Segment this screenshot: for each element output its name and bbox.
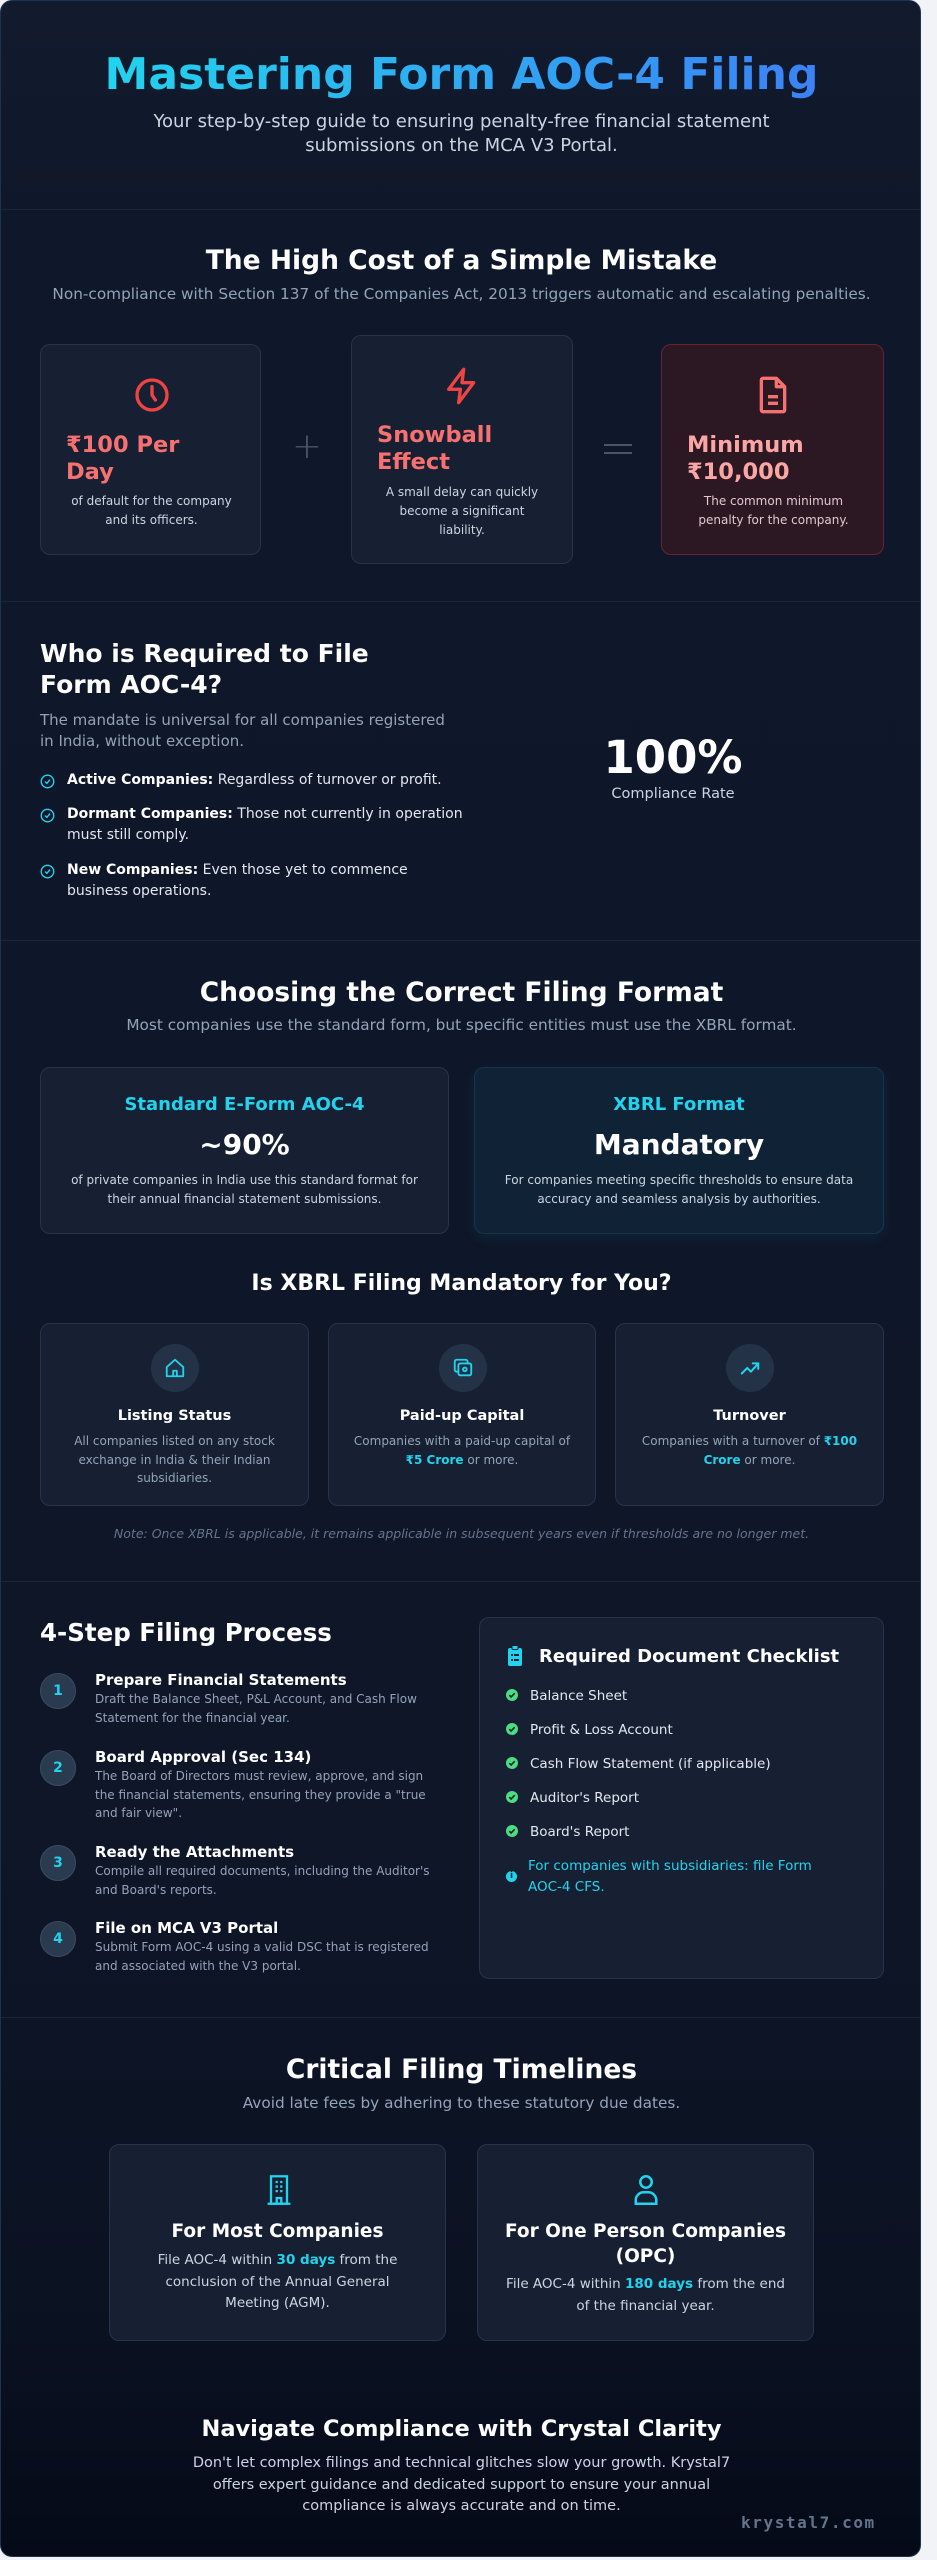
card: listing status [40,1323,309,1506]
card: standard form [40,1067,449,1234]
step 2 [40,1748,426,1820]
card: turnover: Companies with a turnover of ₹100 Crore or more. [642,1434,857,1466]
heading: The High Cost of a Simple Mistake [206,245,717,276]
panel: document checklist [479,1617,884,1979]
section: 4-step process: The Board of Directors must review, approve, and sign the financial statements, ensuring they provide a "true and fair view". [95,1769,426,1820]
heading: XBRL mandatory: Is XBRL Filing Mandatory for You? [251,1271,672,1296]
card: listing status: Listing Status [118,1408,231,1424]
card: 100 per day [40,344,261,555]
desc: The common minimum penalty for the company. [698,494,849,527]
icon: home [151,1344,199,1392]
section: who must file [40,639,463,899]
card: paid-up capital: Paid-up Capital [400,1408,524,1424]
step 3 [40,1843,430,1896]
panel: document checklist: Auditor's Report [530,1790,639,1806]
icon: clock [135,378,169,412]
section: 4-step process: Board Approval (Sec 134) [95,1748,311,1766]
card: XBRL [474,1067,884,1234]
icon: document [760,376,786,414]
card: paid-up capital [328,1323,596,1506]
heading: Choosing the Correct Filing Format [200,977,723,1008]
checklist items [506,1688,812,1895]
card: most companies: For Most Companies [172,2221,383,2242]
icon: money [439,1344,487,1392]
bullet list [40,772,463,899]
footer paragraph: Don't let complex filings and technical glitches slow your growth. Krystal7 offers expert guidance and dedicated support to ensure your annual compliance is always accurate and on time. [193,2455,730,2514]
heading: Who is Required to File Form AOC-4? [40,639,369,699]
section: 4-step process [40,1618,430,1972]
section: 4-step process: Ready the Attachments [95,1843,294,1861]
card: most companies: File AOC-4 within 30 days from the conclusion of the Annual General Meeting (AGM). [158,2252,397,2311]
card: most companies [109,2144,446,2341]
section: 4-step process: 2 [53,1760,63,1776]
card: turnover [615,1323,884,1506]
card: XBRL: Mandatory [594,1128,764,1161]
step 1 [40,1671,417,1724]
title: Effect [377,449,450,475]
icon: building [268,2175,290,2205]
title [687,432,804,485]
section: timelines [242,2054,680,2112]
panel: document checklist: Profit & Loss Account [530,1722,673,1738]
subheading: Most companies use the standard form, but specific entities must use the XBRL format. [126,1016,797,1034]
panel: document checklist: Cash Flow Statement (if applicable) [530,1756,771,1772]
panel: document checklist: Balance Sheet [530,1688,627,1704]
bullet: active: Active Companies: Regardless of turnover or profit. [67,772,442,788]
title [66,432,180,485]
icon: clipboard [508,1646,522,1666]
title [377,422,492,475]
card: standard form: ~90% [199,1128,290,1161]
brand: krystal7.com: krystal7.com [741,2513,876,2532]
note: Note: Once XBRL is applicable, it remains applicable in subsequent years even if thresholds are no longer met. [114,1526,809,1541]
title: Minimum [687,432,804,458]
card: snowball [351,335,573,564]
title: Mastering Form AOC-4 Filing [105,49,818,100]
title: ₹100 Per [66,432,179,458]
card: XBRL: XBRL Format [613,1094,745,1115]
card: OPC: File AOC-4 within 180 days from the end of the financial year. [506,2276,785,2314]
bullet: new: New Companies: Even those yet to commence business operations. [67,862,408,899]
desc: of default for the company and its officers. [71,494,232,527]
section: 4-step process: 3 [53,1855,63,1871]
icon: bolt [446,368,476,404]
icon: person [634,2175,658,2205]
icon: trend [726,1344,774,1392]
panel: document checklist: i [510,1871,513,1881]
footer heading: Navigate Compliance with Crystal Clarity [201,2416,722,2442]
footer: call to action [193,2416,730,2514]
panel: document checklist: Board's Report [530,1824,629,1840]
card: listing status: All companies listed on any stock exchange in India & their Indian subsidiaries. [74,1434,275,1485]
plus sign: + [292,426,322,467]
section: 4-step process: Draft the Balance Sheet, P&L Account, and Cash Flow Statement for the financial year. [95,1692,417,1724]
card: turnover: Turnover [713,1408,786,1424]
heading: Critical Filing Timelines [286,2054,637,2085]
section: 4-step process: Prepare Financial Statements [95,1671,347,1689]
step 4 [40,1919,429,1972]
section: 4-step process: Compile all required documents, including the Auditor's and Board's reports. [95,1864,430,1896]
card: paid-up capital: Companies with a paid-up capital of ₹5 Crore or more. [354,1434,570,1466]
subheading: Non-compliance with Section 137 of the Companies Act, 2013 triggers automatic and escalating penalties. [52,285,871,303]
checklist title: Required Document Checklist [539,1646,839,1667]
subtitle: Your step-by-step guide to ensuring penalty-free financial statement submissions on the MCA V3 Portal. [153,111,770,156]
intro text: The mandate is universal for all companies registered in India, without exception. [40,711,445,750]
title: Day [66,459,114,485]
title: ₹10,000 [687,459,789,485]
section: 4-step process: 1 [53,1683,63,1699]
equals sign [604,444,632,446]
title: Snowball [377,422,492,448]
stat: 100%: 100% [603,731,743,784]
card: OPC [477,2144,814,2341]
desc: A small delay can quickly become a significant liability. [386,485,538,537]
section: 4-step process: Submit Form AOC-4 using a valid DSC that is registered and associated with the V3 portal. [95,1940,429,1972]
bullet: dormant: Dormant Companies: Those not currently in operation must still comply. [67,806,463,843]
heading: 4-Step Filing Process [40,1618,332,1647]
stat: 100%: Compliance Rate [611,786,735,802]
card: standard form: of private companies in India use this standard format for their annual financial statement submissions. [71,1173,418,1206]
panel: document checklist: For companies with subsidiaries: file Form AOC-4 CFS. [528,1858,812,1895]
card: OPC: For One Person Companies (OPC) [505,2221,786,2267]
section: 4-step process: 4 [53,1931,63,1947]
subheading: Avoid late fees by adhering to these statutory due dates. [243,2094,680,2112]
section: high cost [52,245,871,303]
section: 4-step process: File on MCA V3 Portal [95,1919,278,1937]
card: standard form: Standard E-Form AOC-4 [124,1094,365,1115]
card: XBRL: For companies meeting specific thresholds to ensure data accuracy and seamless analysis by authorities. [505,1173,853,1206]
card: minimum penalty [661,344,884,555]
section: filing format [126,977,797,1034]
